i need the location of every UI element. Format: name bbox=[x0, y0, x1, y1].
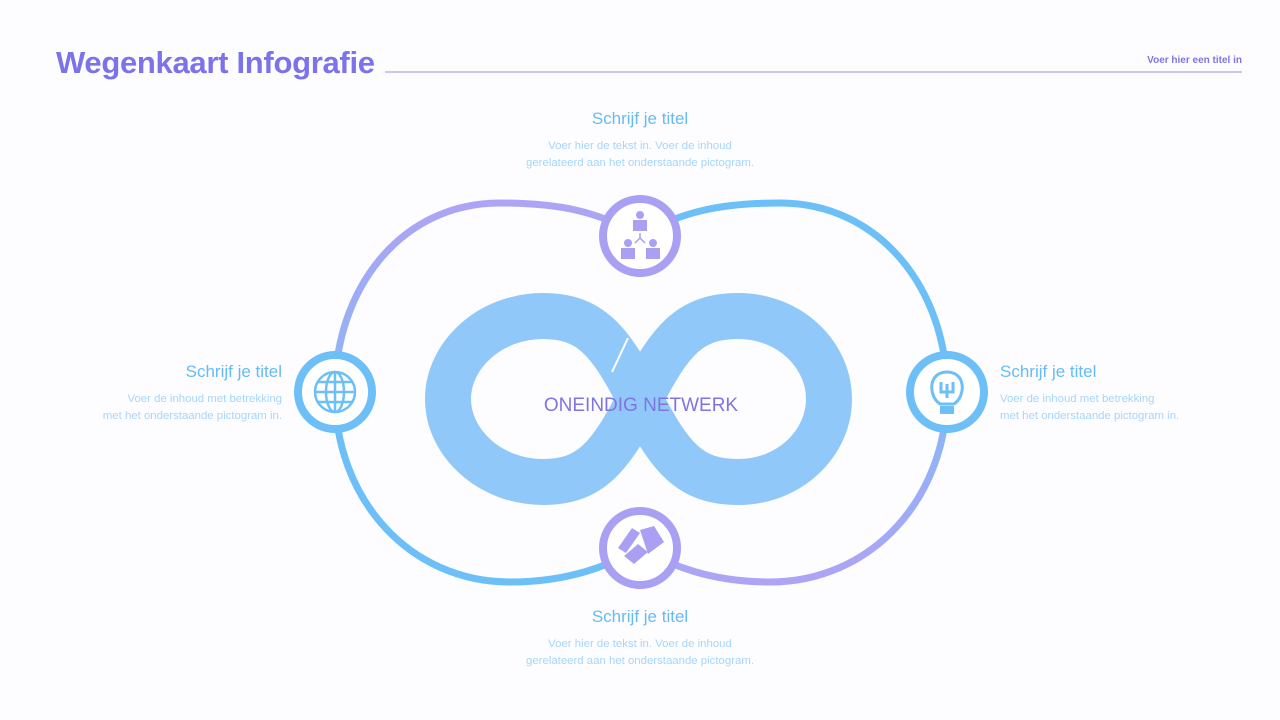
text block: right: met het onderstaande pictogram in. bbox=[1000, 410, 1179, 422]
subtitle: Voer hier een titel in bbox=[1147, 55, 1242, 66]
outer loop: left lobe bbox=[335, 203, 640, 582]
text block: right bbox=[1000, 362, 1179, 422]
text block: left bbox=[103, 362, 282, 422]
text block: bottom bbox=[526, 607, 754, 667]
node: right (light bulb) bbox=[910, 355, 984, 429]
text block: top bbox=[526, 109, 754, 169]
text block: top: Schrijf je titel bbox=[592, 109, 688, 128]
text block: bottom: Schrijf je titel bbox=[592, 607, 688, 626]
header line bbox=[385, 71, 1242, 73]
center label: ONEINDIG NETWERK bbox=[544, 395, 738, 416]
text block: top: Voer hier de tekst in. Voer de inhoud bbox=[548, 140, 732, 152]
node: left (globe) bbox=[298, 355, 372, 429]
title: Wegenkaart Infografie bbox=[56, 45, 375, 80]
node: bottom (handshake) bbox=[603, 511, 677, 585]
text block: bottom: gerelateerd aan het onderstaande pictogram. bbox=[526, 655, 754, 667]
text block: left: Schrijf je titel bbox=[186, 362, 282, 381]
text block: left: met het onderstaande pictogram in. bbox=[103, 410, 282, 422]
text block: top: gerelateerd aan het onderstaande pictogram. bbox=[526, 157, 754, 169]
infinity symbol bbox=[448, 316, 829, 482]
text block: right: Schrijf je titel bbox=[1000, 362, 1096, 381]
text block: left: Voer de inhoud met betrekking bbox=[127, 393, 282, 405]
node: top (people) bbox=[603, 199, 677, 273]
outer loop: right lobe bbox=[640, 203, 947, 582]
text block: bottom: Voer hier de tekst in. Voer de inhoud bbox=[548, 638, 732, 650]
text block: right: Voer de inhoud met betrekking bbox=[1000, 393, 1155, 405]
